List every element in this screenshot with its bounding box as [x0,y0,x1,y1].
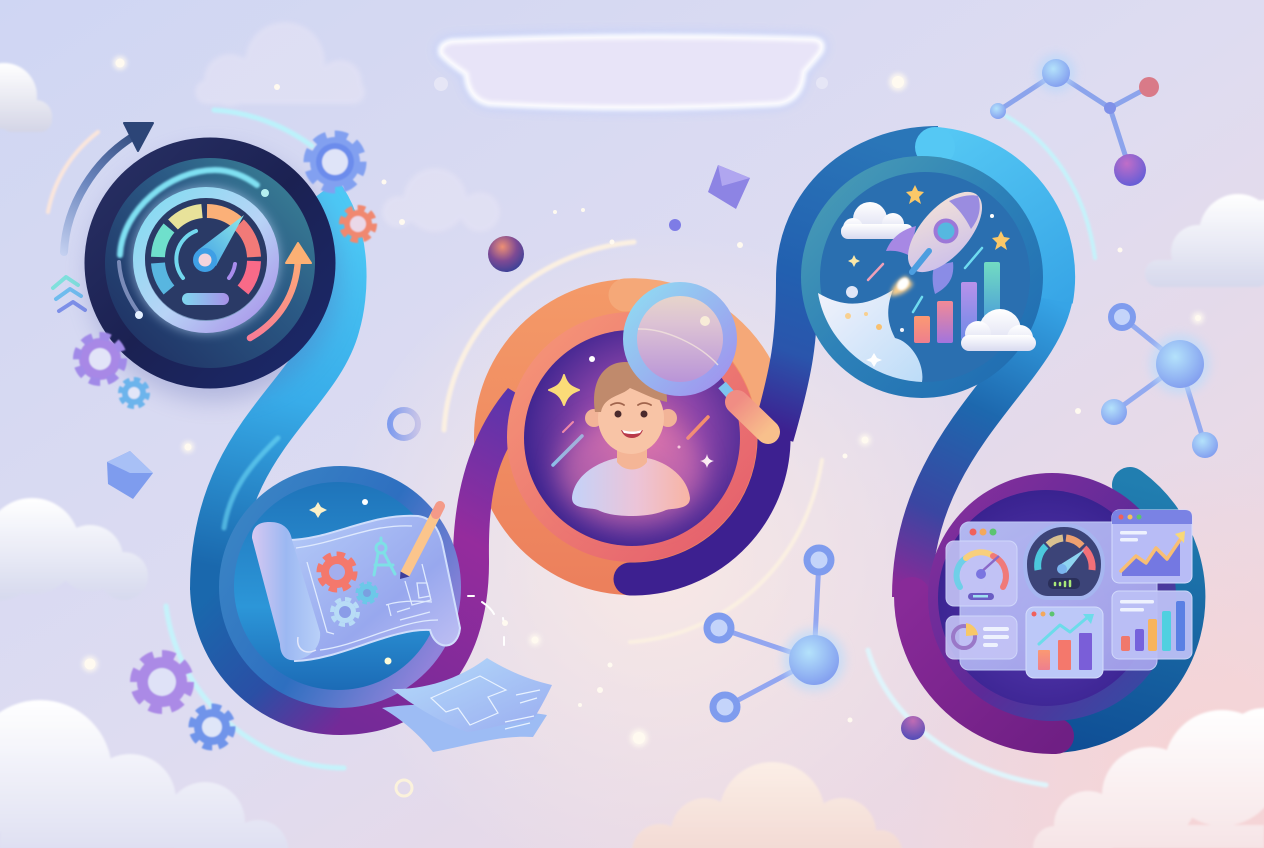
glow arc: peach left [48,132,98,212]
molecule: right [1101,306,1218,458]
orange arrow [250,243,311,338]
icon: gear cyan [120,380,148,406]
sparkle dots [82,56,1204,747]
compass [374,538,395,575]
pencil [400,506,440,579]
cloud: bottom centre [632,762,902,848]
stars and dots [848,185,1010,332]
faint background clouds [195,22,500,232]
bottom right bar card [1112,591,1192,659]
main window [960,522,1157,670]
panel: speedometer circle [84,138,340,401]
ribbon: blue around circle one into circle two [215,195,540,735]
icon: gear lower blue [192,707,232,747]
ring: blue peach [390,410,418,438]
glow arc: cyan top left [214,110,312,146]
glow arc: cream lower centre [630,460,822,642]
icon: chevrons [53,277,85,311]
needle [198,215,244,266]
ribbon: blue from circle three to circle four [773,147,938,436]
glow arc: cyan lower right [868,650,1046,785]
blueprint sheet [252,506,460,661]
rocket chart bars [914,262,1000,343]
icon: gear lower purple [134,654,190,710]
molecule: top right [990,54,1159,186]
blueprint gears [319,554,355,590]
outer glowing arc [119,170,257,312]
cloud in circle left [841,202,913,239]
pie card [946,616,1017,659]
panel: rocket circle [801,156,1043,398]
sphere: lower right [901,716,925,740]
panel: dashboard circle [928,473,1192,721]
icon: gear blue [308,135,362,189]
ribbon: cyan to purple S curve [912,127,1056,736]
cloud: top left [0,63,52,132]
icon: cube [107,451,153,499]
molecule: lower centre [707,548,845,719]
dial [132,186,280,334]
cloud: bottom left [0,700,288,848]
exhaust trail [818,286,922,382]
arrow: dark curved rising arrow [64,123,153,252]
icon: gear coral [342,208,374,240]
ring: cream [396,780,412,796]
top right chart card [1112,510,1192,583]
cloud in circle right [961,309,1036,351]
icon: gear purple [77,336,123,382]
icon: loose blueprint sheets [382,658,552,752]
middle chart card [1026,607,1103,678]
icon: diamond [708,165,750,209]
panel: blueprint circle [219,466,461,708]
glow arc: cyan lower left [166,606,344,768]
disc: orange behind centre circle [474,279,790,595]
glow arc: cyan top right [1006,116,1095,258]
star and dots [309,502,327,518]
glow arc: cream around centre [444,242,634,430]
centre gauge [1025,525,1103,598]
left gauge card [946,541,1017,606]
sphere: dark planet [488,236,524,272]
cloud: left [0,498,148,600]
icon: magnifying glass [630,289,768,432]
person [559,362,703,525]
cloud: bottom right [1033,708,1264,848]
window dots [970,528,996,536]
cloud: right [1145,194,1264,287]
sparkles [549,356,714,468]
ribbon: blue arc around circle five [1052,485,1187,735]
sphere: small violet [669,219,681,231]
rocket [886,179,995,296]
empty title banner [434,36,828,108]
panel: person circle [507,312,757,562]
dashes near sheets [468,596,504,645]
streaks [553,417,708,465]
